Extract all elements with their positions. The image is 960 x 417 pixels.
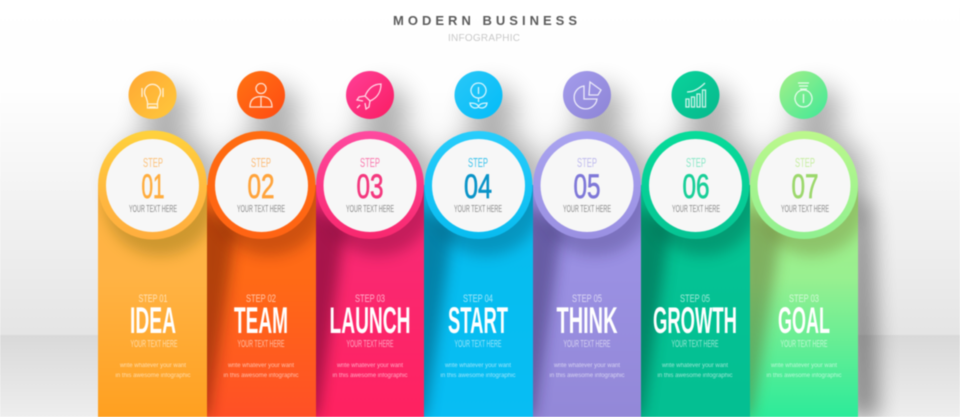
- white badge 7: [758, 139, 850, 232]
- white badge 6: STEP: [686, 155, 706, 170]
- column text 6: write whatever your want: [661, 363, 728, 369]
- white badge 4: [432, 139, 525, 232]
- icon: light bulb head: [128, 71, 176, 119]
- column text 6: in this awesome infographic: [658, 373, 732, 379]
- white badge 3: 03: [356, 168, 384, 206]
- white badge 7: STEP: [795, 155, 815, 170]
- column 5: think: [532, 130, 642, 417]
- column text 4: YOUR TEXT HERE: [454, 339, 502, 350]
- white badge 5: 05: [574, 168, 600, 206]
- column text 1: IDEA: [130, 300, 176, 341]
- white badge 5: STEP: [577, 155, 597, 170]
- column text 2: [224, 293, 298, 379]
- white badge 4: YOUR TEXT HERE: [454, 204, 502, 215]
- cap ring 1: [98, 130, 207, 240]
- white badge 7: YOUR TEXT HERE: [781, 204, 829, 215]
- cap ring 2: [208, 131, 316, 239]
- icon: coin plant: [454, 71, 502, 119]
- cap ring 6: [642, 131, 750, 239]
- cap ring 5: [533, 131, 641, 239]
- white badge 5: YOUR TEXT HERE: [563, 204, 611, 215]
- column text 3: LAUNCH: [330, 300, 410, 341]
- white badge 6: YOUR TEXT HERE: [672, 204, 720, 215]
- column body 1: [98, 185, 207, 417]
- title: INFOGRAPHIC: [448, 33, 520, 44]
- white badge 4: STEP: [468, 155, 488, 170]
- column text 4: [440, 293, 516, 379]
- column text 1: STEP 01: [138, 293, 168, 305]
- column text 2: in this awesome infographic: [224, 373, 298, 379]
- white badge 3: [324, 139, 416, 232]
- icon: pie chart: [563, 71, 611, 119]
- white badge 1: [106, 139, 199, 232]
- white badge 1: STEP: [143, 155, 163, 170]
- column text 2: TEAM: [234, 300, 288, 341]
- white badge 2: STEP: [251, 155, 271, 170]
- column text 1: [116, 293, 190, 379]
- column 1: idea: [98, 130, 216, 417]
- column text 5: THINK: [556, 300, 618, 341]
- column text 6: YOUR TEXT HERE: [672, 339, 719, 350]
- white badge 3: YOUR TEXT HERE: [346, 204, 394, 215]
- column text 6: STEP 05: [680, 293, 710, 305]
- column text 4: START: [448, 300, 508, 341]
- column text 4: STEP 04: [463, 293, 493, 305]
- column text 5: in this awesome infographic: [550, 373, 624, 379]
- column text 5: STEP 05: [572, 293, 602, 305]
- column text 3: write whatever your want: [336, 363, 403, 369]
- white badge 6: 06: [682, 168, 710, 206]
- icon: rising bar chart: [672, 71, 720, 119]
- column 6: growth: GROWTH: [653, 300, 737, 341]
- white badge 3: STEP: [360, 155, 380, 170]
- white badge 4: 04: [464, 168, 492, 206]
- column text 2: STEP 02: [246, 293, 276, 305]
- column text 7: write whatever your want: [770, 363, 837, 369]
- column text 2: write whatever your want: [227, 363, 294, 369]
- column 6: growth: [640, 130, 751, 417]
- column text 7: GOAL: [778, 300, 830, 341]
- column text 7: in this awesome infographic: [766, 373, 842, 379]
- column body 3: [316, 185, 424, 417]
- white badge 2: YOUR TEXT HERE: [237, 204, 285, 215]
- icon: rocket: [346, 71, 394, 119]
- column body 7: [750, 185, 858, 417]
- column 3: launch: [315, 130, 425, 417]
- title: [393, 13, 577, 44]
- column text 4: write whatever your want: [444, 363, 511, 369]
- white badge 2: 02: [248, 168, 274, 206]
- icon: money bag: [780, 71, 828, 119]
- column text 7: STEP 03: [789, 293, 819, 305]
- white badge 2: [215, 139, 308, 232]
- icon: businessperson: [237, 71, 285, 119]
- column text 3: STEP 03: [355, 293, 385, 305]
- cap ring 7: [750, 131, 858, 239]
- column body 2: [207, 185, 316, 417]
- column body 6: [641, 185, 750, 417]
- white badge 5: [540, 139, 634, 232]
- column text 5: write whatever your want: [553, 363, 620, 369]
- white badge 6: [649, 139, 742, 232]
- column text 1: write whatever your want: [119, 363, 186, 369]
- column 4: start: [423, 130, 534, 417]
- white badge 1: YOUR TEXT HERE: [129, 204, 177, 215]
- column 7: goal: [749, 130, 859, 417]
- column text 1: in this awesome infographic: [116, 373, 190, 379]
- cap ring 4: [424, 131, 532, 239]
- column text 3: YOUR TEXT HERE: [346, 339, 394, 350]
- soft shadows behind the caps and icons: [115, 86, 866, 230]
- column text 2: YOUR TEXT HERE: [238, 339, 285, 350]
- column text 5: YOUR TEXT HERE: [564, 339, 611, 350]
- column body 5: [533, 185, 641, 417]
- column text 3: in this awesome infographic: [332, 373, 408, 379]
- column text 7: [766, 293, 842, 379]
- column text 6: [653, 293, 737, 379]
- column 2: team: [206, 130, 317, 417]
- column text 1: YOUR TEXT HERE: [130, 339, 178, 350]
- column text 3: [330, 293, 410, 379]
- white badge 1: 01: [142, 168, 164, 206]
- cap ring 3: [316, 131, 424, 239]
- column text 4: in this awesome infographic: [440, 373, 516, 379]
- white badge 7: 07: [792, 168, 818, 206]
- column text 5: [550, 293, 624, 379]
- soft shadow right of the last column: [850, 195, 878, 417]
- column body 4: [424, 185, 533, 417]
- title: MODERN BUSINESS: [393, 13, 577, 28]
- column text 7: YOUR TEXT HERE: [780, 339, 828, 350]
